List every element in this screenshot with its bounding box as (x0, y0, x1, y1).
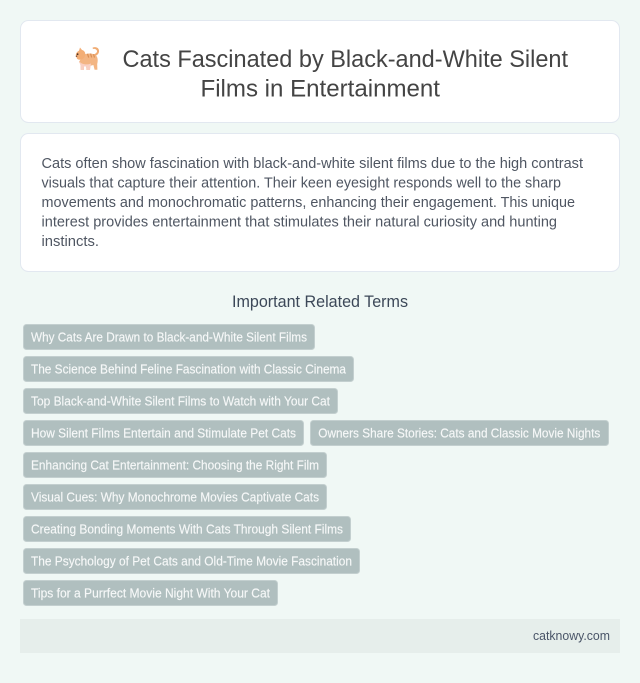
tag 7: Visual Cues: Why Monochrome Movies Captivate Cats (31, 490, 319, 504)
tag list (24, 324, 608, 606)
tag 10 (24, 580, 278, 606)
tag 7 (24, 484, 326, 510)
tag 3: Top Black-and-White Silent Films to Watch with Your Cat (31, 394, 330, 408)
tag 6: Enhancing Cat Entertainment: Choosing the Right Film (31, 458, 319, 472)
tag 3 (24, 388, 338, 414)
tag 4 (24, 420, 304, 446)
tag 9 (24, 548, 360, 574)
tag 1 (24, 324, 314, 350)
paragraph text: Cats often show fascination with black-and-white silent films due to the high contrast (42, 155, 584, 172)
heading text: Films in Entertainment (200, 76, 440, 102)
panel: description (20, 134, 620, 272)
tag 1: Why Cats Are Drawn to Black-and-White Silent Films (31, 330, 307, 344)
tag 10: Tips for a Purrfect Movie Night With Your Cat (31, 586, 270, 600)
tag 4: How Silent Films Entertain and Stimulate Pet Cats (31, 426, 296, 440)
panel: title (20, 20, 620, 122)
footer (20, 619, 620, 653)
heading text (122, 46, 568, 102)
paragraph text: visuals that capture their attention. Their keen eyesight responds well to the sharp (42, 174, 561, 192)
paragraph text: movements and monochromatic patterns, enhancing their engagement. This unique (42, 194, 575, 211)
paragraph text: instincts. (42, 233, 99, 250)
heading: related terms: Important Related Terms (232, 293, 408, 311)
tag 6 (24, 452, 326, 478)
tag 2 (24, 356, 354, 382)
paragraph text: interest provides entertainment that stimulates their natural curiosity and hunting (42, 214, 557, 230)
footer source text: catknowy.com (533, 628, 610, 643)
icon: cat (76, 47, 99, 70)
tag 8: Creating Bonding Moments With Cats Through Silent Films (31, 522, 343, 536)
paragraph text (42, 155, 584, 250)
tag 9: The Psychology of Pet Cats and Old-Time Movie Fascination (31, 554, 352, 568)
tag 2: The Science Behind Feline Fascination with Classic Cinema (31, 362, 347, 376)
tag 5: Owners Share Stories: Cats and Classic Movie Nights (318, 426, 601, 440)
heading text: Cats Fascinated by Black-and-White Silent (122, 46, 568, 73)
tag 8 (24, 516, 350, 542)
tag 5 (310, 420, 608, 446)
